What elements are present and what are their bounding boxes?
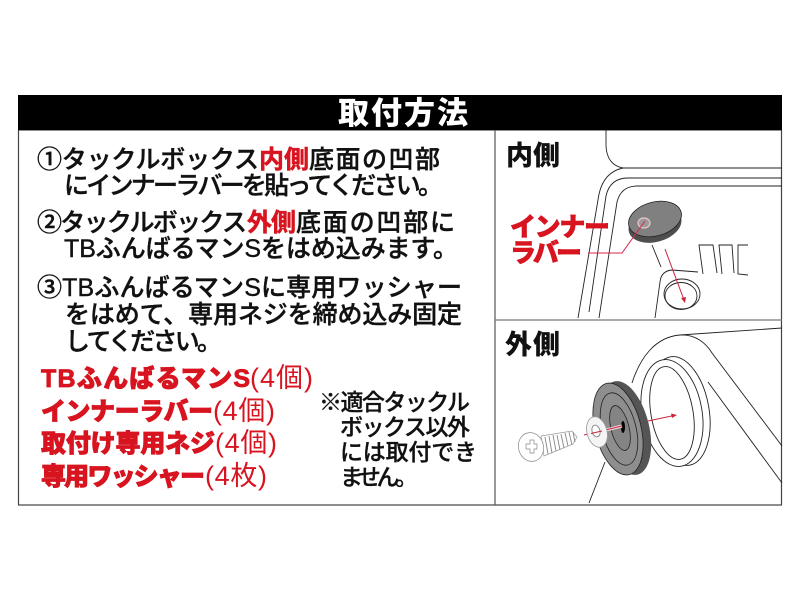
compatibility note: には取付でき	[340, 439, 477, 465]
step 1: 内側	[259, 146, 309, 174]
step 3	[37, 274, 462, 356]
step 2: 底面の凹部に	[296, 209, 455, 237]
step 3: ③TBふんばるマンSに専用ワッシャー	[37, 274, 462, 302]
title bar	[18, 95, 782, 131]
label: inner rubber: ラバー	[510, 238, 582, 268]
panel frame	[18, 130, 782, 505]
red arrow through parts	[584, 414, 677, 435]
step 1: にインナーラバーを貼ってください。	[64, 172, 443, 200]
parts list: (4個)	[215, 428, 277, 458]
parts list: (4個)	[250, 363, 313, 393]
step 2: 外側	[247, 209, 296, 237]
mounting ring	[633, 352, 718, 471]
parts list: 専用ワッシャー	[41, 463, 205, 491]
washer	[583, 414, 611, 450]
compatibility note: ※適合タックル	[319, 389, 470, 415]
label: inner rubber: インナー	[510, 212, 610, 242]
instruction steps	[37, 146, 462, 356]
parts list: (4個)	[213, 396, 275, 426]
title bar: 取付方法	[338, 96, 468, 131]
parts list: 取付け専用ネジ	[41, 430, 215, 458]
inner rubber disc	[625, 196, 685, 248]
compatibility note: ボックス以外	[340, 414, 470, 440]
outside view heading: 外側	[505, 330, 560, 360]
parts list: TBふんばるマンS	[41, 365, 250, 393]
step 1: 底面の凹部	[309, 146, 440, 174]
step 2: ②タックルボックス	[37, 209, 247, 237]
inside view heading: 内側	[506, 141, 560, 171]
red arrow into hole	[665, 249, 686, 303]
step 3: してください。	[65, 328, 222, 356]
step 1: ①タックルボックス	[37, 146, 259, 174]
TB funbaru-man S disc	[584, 376, 660, 480]
screw	[515, 430, 577, 464]
illustration: inside of tackle box	[578, 130, 782, 318]
compatibility note: ません。	[340, 464, 418, 490]
step 3: をはめて、専用ネジを締め込み固定	[65, 301, 462, 329]
step 1	[37, 146, 443, 200]
compatibility note	[319, 389, 477, 490]
label: inner rubber	[510, 212, 645, 268]
step 2: TBふんばるマンSをはめ込みます。	[64, 235, 458, 263]
hole	[664, 279, 700, 310]
step 2	[37, 209, 458, 263]
parts list: インナーラバー	[41, 398, 213, 426]
parts list: (4枚)	[205, 461, 267, 491]
parts list	[41, 363, 313, 491]
illustration: outside of tackle box	[515, 328, 782, 503]
